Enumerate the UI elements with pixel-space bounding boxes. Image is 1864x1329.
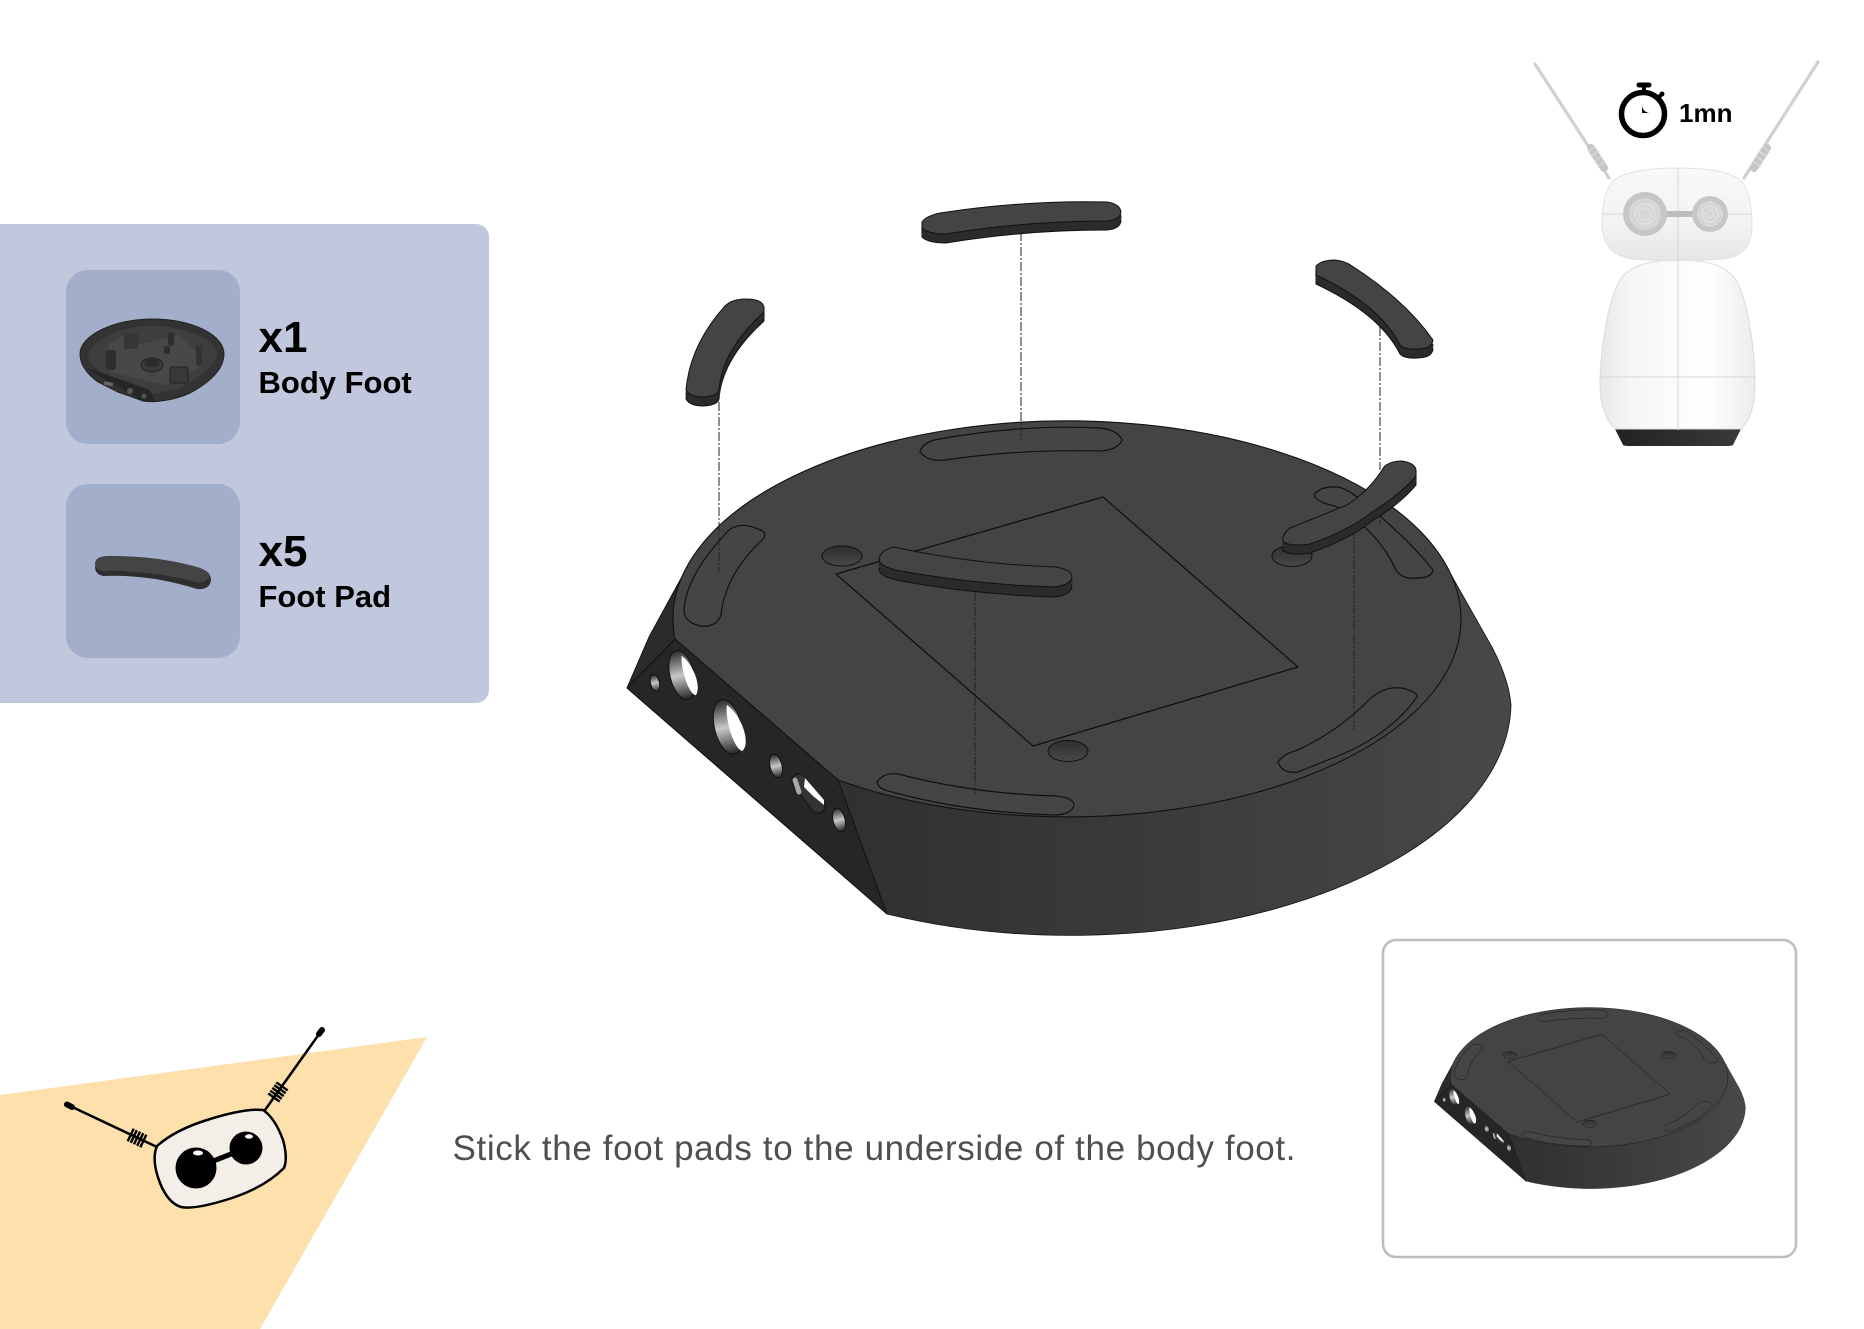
main illustration: body foot underside (627, 421, 1511, 935)
mascot background (0, 1037, 427, 1329)
foot pad: right (1316, 260, 1433, 358)
label: Foot Pad: Foot Pad (258, 579, 391, 614)
part tile: body foot (66, 270, 412, 444)
assembled body foot (1434, 1008, 1745, 1189)
guide lines (719, 232, 1380, 794)
foot pad: left (686, 299, 764, 406)
label: Body Foot: Body Foot (258, 365, 412, 400)
robot foot (1615, 429, 1741, 446)
robot body (1600, 260, 1755, 429)
label: time 1mn: 1mn (1679, 98, 1732, 128)
label: x1 quantity: x1 (258, 313, 307, 362)
antenna left (1535, 64, 1609, 178)
robot eyes (1623, 192, 1728, 236)
mascot eyes (176, 1132, 262, 1188)
icon: body foot (80, 319, 224, 402)
panel: parts list (0, 224, 489, 703)
body seams (1600, 168, 1755, 430)
antenna right (1744, 62, 1818, 178)
foot pad: front (879, 547, 1072, 597)
foot pad: near right (1283, 461, 1416, 554)
robot head (1602, 168, 1752, 260)
robot illustration (1535, 62, 1818, 446)
part tile: foot pad (66, 484, 391, 658)
mascot face (155, 1110, 286, 1208)
panel: finished result (1383, 940, 1796, 1257)
mascot antennas (67, 1030, 322, 1147)
mascot: robot head (67, 1030, 322, 1208)
instruction text: Stick the foot pads to the underside of the body foot. (452, 1129, 1296, 1168)
label: x5 quantity: x5 (258, 527, 307, 576)
icon: stopwatch (1622, 85, 1664, 136)
icon: foot pad (95, 556, 211, 589)
foot pad: top (922, 202, 1121, 243)
